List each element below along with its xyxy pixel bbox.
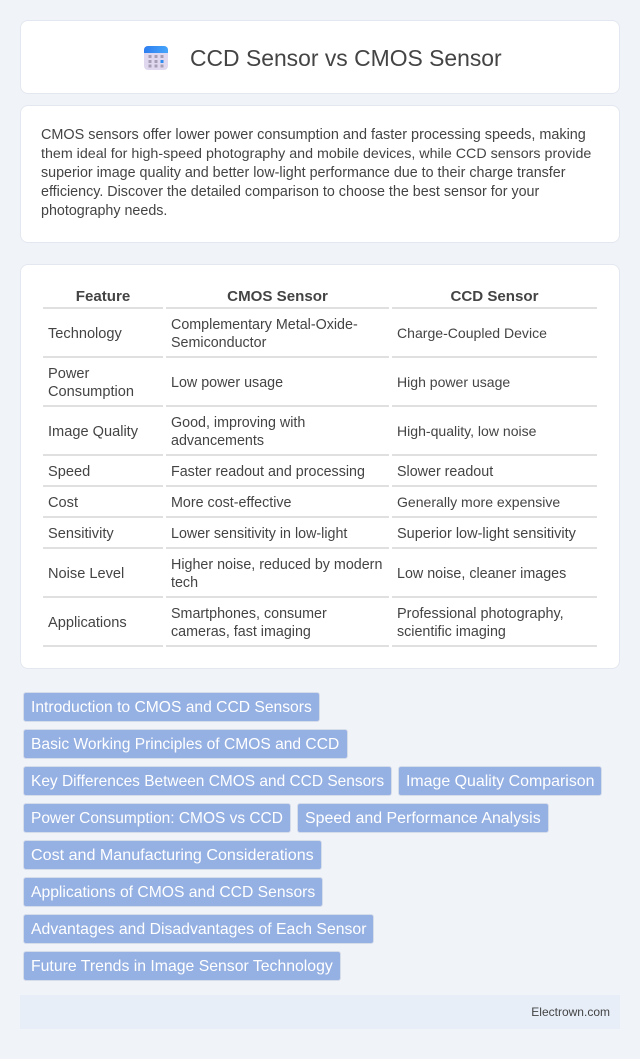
tag (23, 766, 392, 796)
table header row: CCD Sensor (450, 288, 539, 305)
tag: Power Consumption: CMOS vs CCD (31, 810, 283, 827)
row: Cost: More cost-effective (171, 495, 292, 511)
row: Sensitivity: Sensitivity (48, 526, 114, 542)
footer credit: Electrown.com (531, 1005, 610, 1019)
panel: title header (20, 20, 620, 94)
tag (23, 729, 348, 759)
row: Cost: Generally more expensive (397, 494, 560, 510)
row: Image Quality (48, 415, 536, 449)
row: Speed: Speed (48, 464, 90, 480)
tag: Basic Working Principles of CMOS and CCD (31, 736, 339, 753)
table header row: CMOS Sensor (227, 288, 328, 305)
row: Image Quality: High-quality, low noise (397, 423, 536, 439)
panel: comparison table (20, 264, 620, 669)
row: Technology: Technology (48, 326, 122, 342)
row: Technology: Semiconductor (171, 335, 266, 351)
row: Power Consumption: Consumption (48, 384, 134, 400)
row: Speed: Faster readout and processing (171, 464, 365, 480)
row: Cost: Cost (48, 495, 78, 511)
tag (23, 840, 322, 870)
text block: intro paragraph: superior image quality and better low-light performance due to their charge transfer (41, 165, 566, 181)
panel: intro text (20, 105, 620, 243)
row: Applications: Professional photography, (397, 606, 564, 622)
tag (23, 914, 374, 944)
icon: calendar-style sensor grid (144, 46, 168, 70)
footer (20, 995, 620, 1029)
text block: intro paragraph: photography needs. (41, 203, 167, 219)
row: Speed: Slower readout (397, 464, 493, 480)
row: Applications: cameras, fast imaging (171, 624, 311, 640)
row: Technology: Charge-Coupled Device (397, 325, 547, 341)
row: Noise Level: Low noise, cleaner images (397, 566, 566, 582)
text block: intro paragraph: efficiency. Discover the detailed comparison to choose the best sensor for your (41, 184, 539, 200)
table header row (76, 288, 539, 305)
row: Speed (48, 464, 494, 480)
row: Technology: Complementary Metal-Oxide- (171, 317, 358, 333)
tag: Speed and Performance Analysis (305, 810, 541, 827)
tag (398, 766, 602, 796)
row: Technology (48, 317, 547, 351)
tag (23, 877, 323, 907)
tag: Cost and Manufacturing Considerations (31, 846, 314, 864)
tag: Introduction to CMOS and CCD Sensors (31, 699, 312, 716)
row: Noise Level: Higher noise, reduced by modern (171, 557, 382, 573)
row: Applications: Applications (48, 615, 127, 631)
row: Cost (48, 494, 560, 511)
tag (23, 692, 320, 722)
row: Applications (48, 606, 564, 640)
tag: Advantages and Disadvantages of Each Sensor (31, 921, 366, 938)
row: Image Quality: Good, improving with (171, 415, 305, 431)
row: Image Quality: Image Quality (48, 424, 138, 440)
row: Sensitivity (48, 526, 576, 542)
tag: Image Quality Comparison (406, 773, 594, 790)
row: Power Consumption: High power usage (397, 374, 510, 390)
row: Power Consumption: Power (48, 366, 89, 382)
text block: intro paragraph (41, 127, 591, 219)
tag: Applications of CMOS and CCD Sensors (31, 884, 315, 901)
row: Applications: Smartphones, consumer (171, 606, 327, 622)
row: Power Consumption: Low power usage (171, 375, 283, 391)
row: Noise Level (48, 557, 566, 591)
row: Sensitivity: Superior low-light sensitivity (397, 526, 576, 542)
row: Sensitivity: Lower sensitivity in low-light (171, 526, 347, 542)
tag: Key Differences Between CMOS and CCD Sensors (31, 773, 384, 790)
tag: Future Trends in Image Sensor Technology (31, 958, 333, 975)
row: Noise Level: Noise Level (48, 566, 124, 582)
tag (23, 803, 291, 833)
text block: intro paragraph: CMOS sensors offer lower power consumption and faster processing speeds, making (41, 127, 586, 143)
tag (297, 803, 549, 833)
tag (23, 951, 341, 981)
row: Noise Level: tech (171, 575, 198, 591)
title: CCD Sensor vs CMOS Sensor (190, 45, 502, 71)
text block: intro paragraph: them ideal for high-speed photography and mobile devices, while CCD sensors provide (41, 146, 591, 162)
row: Image Quality: advancements (171, 433, 264, 449)
tag list: section topics (23, 692, 602, 981)
row: Power Consumption (48, 366, 510, 400)
row: Applications: scientific imaging (397, 624, 506, 640)
table header row: Feature (76, 288, 130, 305)
